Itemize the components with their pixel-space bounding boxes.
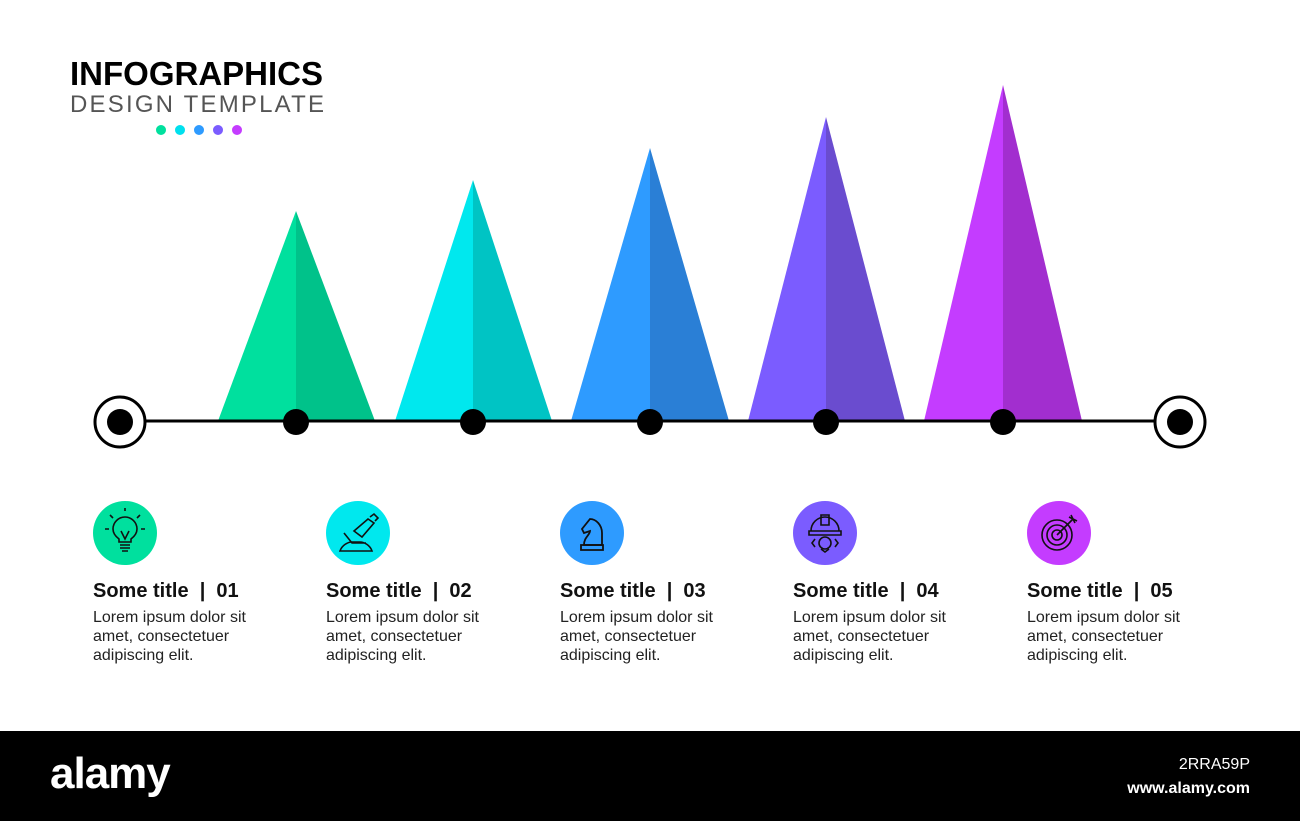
icon: chess knight: [560, 501, 624, 565]
triangle 5: [924, 85, 1082, 421]
footer logo: alamy: [50, 749, 170, 798]
icon: target: [1027, 501, 1091, 565]
step 3: Lorem ipsum dolor sit amet, consectetuer adipiscing elit.: [560, 609, 713, 664]
step 5: Lorem ipsum dolor sit amet, consectetuer adipiscing elit.: [1027, 609, 1180, 664]
step 5: Some title | 05: [1027, 580, 1173, 602]
timeline end marker: [1155, 397, 1205, 447]
step 1: Some title | 01: [93, 580, 239, 602]
triangle 4: [748, 117, 905, 421]
step 1: Lorem ipsum dolor sit amet, consectetuer adipiscing elit.: [93, 609, 246, 664]
step 4: [793, 501, 946, 664]
footer id: [1127, 756, 1250, 797]
triangle 1: [218, 211, 375, 421]
step 1: [93, 501, 246, 664]
step 3: Some title | 03: [560, 580, 706, 602]
footer id: www.alamy.com: [1127, 780, 1250, 797]
step 2: Lorem ipsum dolor sit amet, consectetuer adipiscing elit.: [326, 609, 479, 664]
icon: lightbulb: [93, 501, 157, 565]
timeline start marker: [95, 397, 145, 447]
icon: helmet gear: [793, 501, 857, 565]
footer bar: [0, 731, 1300, 821]
step 2: [326, 501, 479, 664]
icon: microscope: [326, 501, 390, 565]
step 5: [1027, 501, 1180, 664]
step 4: Lorem ipsum dolor sit amet, consectetuer adipiscing elit.: [793, 609, 946, 664]
footer id: 2RRA59P: [1179, 756, 1250, 773]
chart: triangles timeline: [94, 85, 1206, 448]
step 3: [560, 501, 713, 664]
title: INFOGRAPHICS: [70, 55, 323, 92]
step 4: Some title | 04: [793, 580, 939, 602]
title: DESIGN TEMPLATE: [70, 91, 326, 118]
triangle 3: [571, 148, 729, 421]
timeline dots: [283, 409, 1016, 435]
step 2: Some title | 02: [326, 580, 472, 602]
triangle 2: [395, 180, 552, 421]
title: [70, 55, 326, 135]
